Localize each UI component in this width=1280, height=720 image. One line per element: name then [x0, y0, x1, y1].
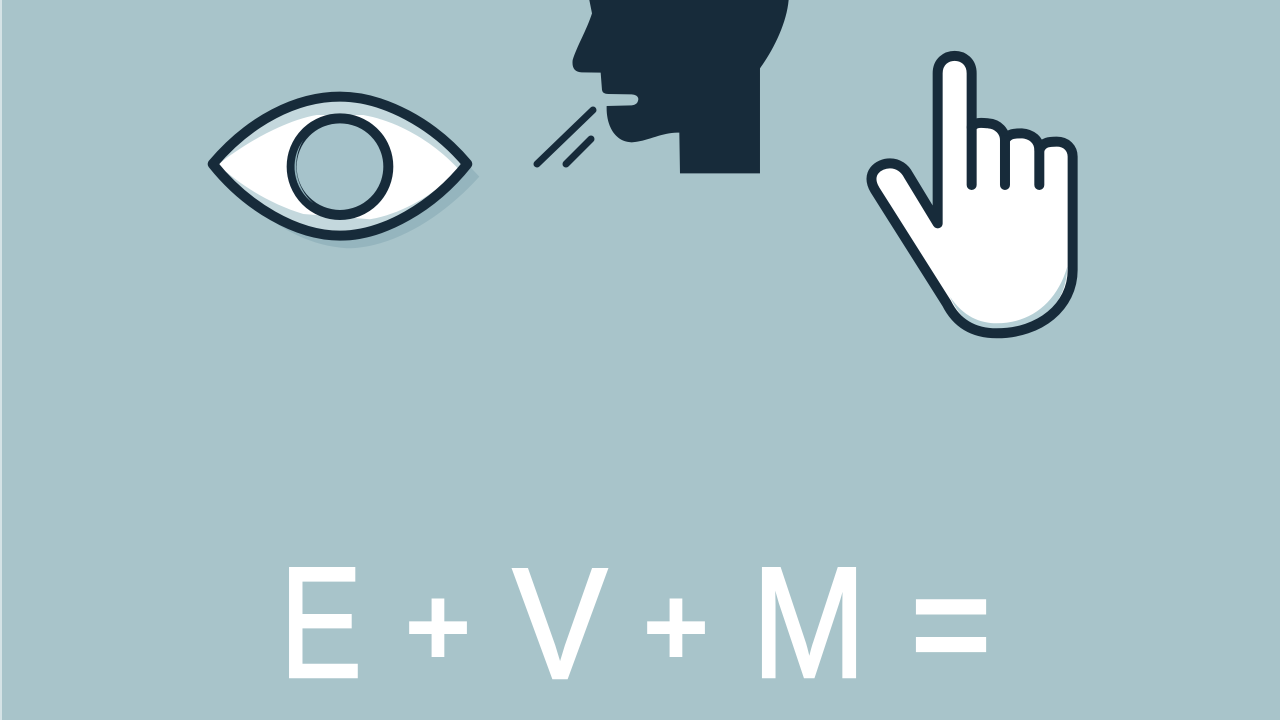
icon: pointing hand [871, 56, 1073, 333]
formula: E + V + M = [280, 535, 992, 712]
letter V: V [513, 535, 607, 712]
letter E: E [280, 535, 362, 712]
letter M: M [752, 535, 866, 711]
equals sign: = [910, 545, 992, 702]
plus sign: + [404, 563, 472, 691]
icon: speaking head silhouette [572, 0, 789, 173]
plus sign: + [642, 563, 710, 691]
icon: eye [213, 97, 479, 248]
icon: breath lines from mouth [537, 110, 593, 164]
